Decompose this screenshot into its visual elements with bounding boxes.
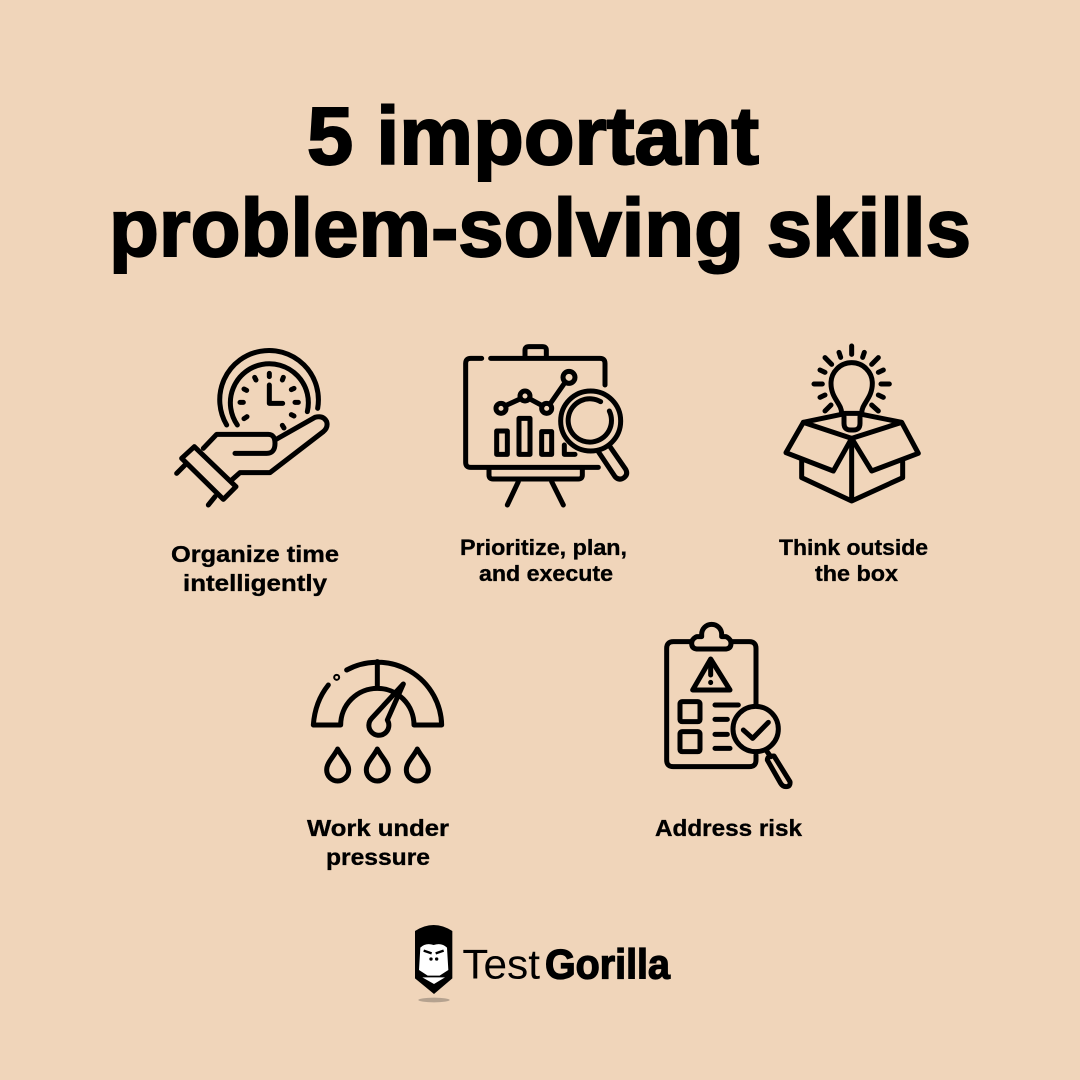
icon: presentation board with magnifier: [466, 347, 627, 505]
logo wordmark: Test: [462, 940, 540, 987]
label: organize time: [171, 541, 339, 596]
title: problem-solving skills: [109, 183, 971, 274]
label: organize time: intelligently: [183, 570, 327, 596]
logo wordmark: Gorilla: [545, 940, 671, 987]
label: work under pressure: pressure: [326, 844, 430, 870]
label: address risk: Address risk: [655, 815, 802, 841]
icon: risk checklist with magnifier: [667, 624, 790, 787]
title: 5 important: [307, 91, 759, 182]
icon: hand holding clock: [177, 350, 327, 505]
logo wordmark: [462, 940, 671, 987]
label: think outside: [779, 535, 928, 586]
label: prioritize: Prioritize, plan,: [460, 535, 627, 560]
icon: light bulb in box: [786, 346, 918, 501]
label: think outside: Think outside: [779, 535, 928, 560]
label: work under pressure: Work under: [307, 815, 449, 841]
label: prioritize: and execute: [479, 561, 613, 586]
label: think outside: the box: [815, 561, 899, 586]
label: work under pressure: [307, 815, 449, 870]
logo: TestGorilla: [415, 925, 671, 1002]
label: organize time: Organize time: [171, 541, 339, 567]
icon: pressure gauge with drops: [313, 662, 442, 781]
label: prioritize: [460, 535, 627, 586]
logo mark: gorilla pencil: [415, 925, 452, 1002]
title: [109, 91, 971, 274]
